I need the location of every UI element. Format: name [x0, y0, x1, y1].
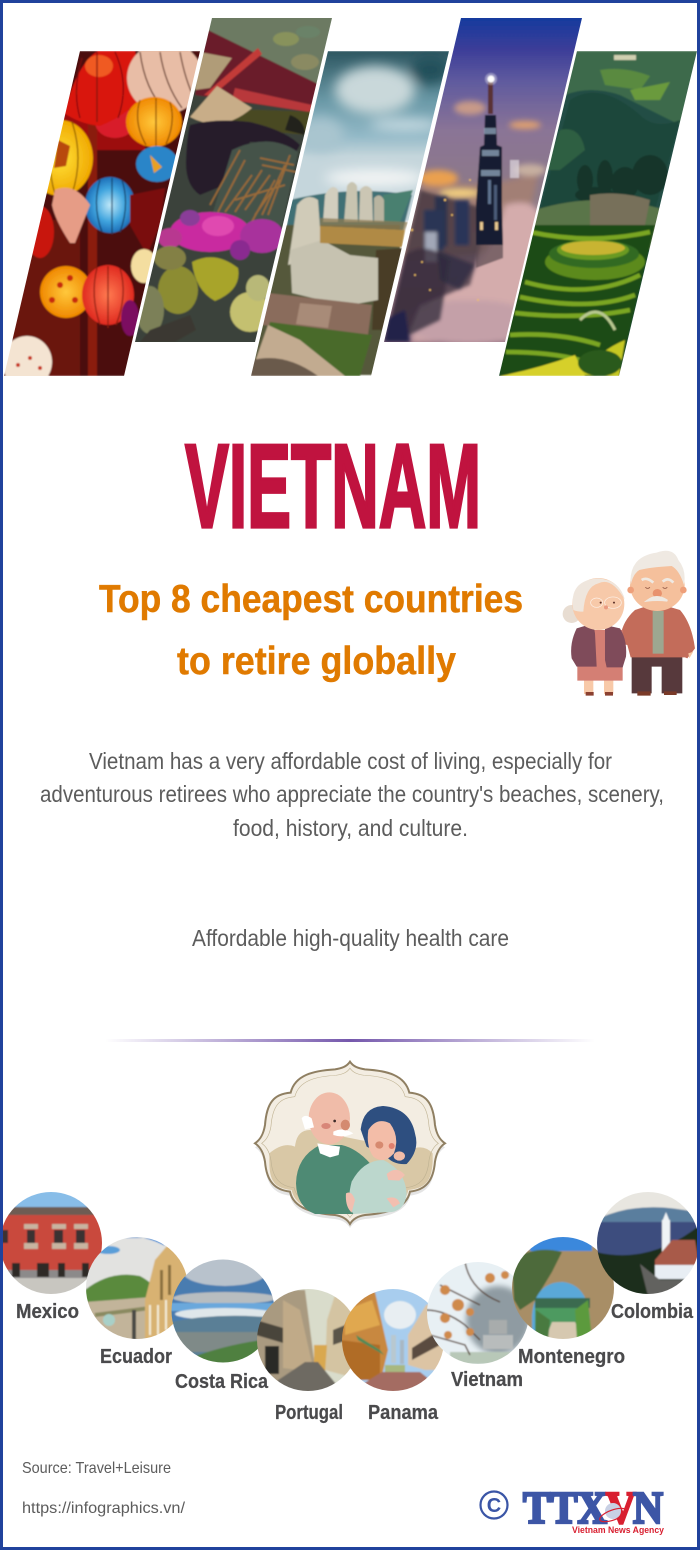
grandfather: [296, 1092, 370, 1214]
photo panel: Landmark 81 tower at night: [380, 15, 585, 345]
photo circle: Panama: [340, 1288, 446, 1392]
photo circle: Colombia: [596, 1191, 700, 1296]
woman: [563, 578, 626, 696]
agency name: Vietnam News Agency: [572, 1525, 665, 1536]
country labels: Ecuador: [100, 1346, 172, 1368]
logo letters: [523, 1482, 663, 1533]
photo panel: rice terraces: [495, 51, 700, 376]
country labels: Colombia: [611, 1301, 694, 1323]
country labels: Mexico: [16, 1301, 79, 1323]
man: [620, 551, 695, 696]
website url: https://infographics.vn/: [22, 1500, 186, 1517]
country labels: [16, 1301, 694, 1424]
grandmother: [346, 1106, 416, 1214]
copyright symbol: C: [487, 1495, 501, 1517]
globe: [598, 1503, 628, 1524]
photo panel: woman sorting lotus flowers: [130, 15, 335, 345]
photo circle: Vietnam: [426, 1261, 530, 1365]
intro paragraph: food, history, and culture.: [233, 815, 468, 841]
heading: top 8 cheapest countries: Top 8 cheapest countries: [99, 578, 523, 621]
text: affordable health care: Affordable high-quality health care: [192, 925, 509, 951]
country labels: Costa Rica: [175, 1371, 269, 1393]
illustration: elderly couple standing: [563, 551, 695, 696]
intro paragraph: [40, 748, 664, 841]
logo letters: TTX: [523, 1482, 607, 1533]
country labels: Vietnam: [451, 1369, 523, 1391]
divider line: [105, 1039, 595, 1042]
source text: Source: Travel+Leisure: [22, 1460, 171, 1477]
heading: top 8 cheapest countries: [99, 578, 523, 683]
photo circle: Montenegro: [510, 1236, 616, 1340]
photo circle: Costa Rica: [170, 1258, 277, 1365]
photo circle: Mexico: [3, 1192, 102, 1294]
illustration: elderly couple in ornamental frame: [255, 1062, 445, 1228]
country labels: Montenegro: [518, 1346, 625, 1368]
heading: top 8 cheapest countries: to retire globally: [177, 640, 456, 683]
photo circle: Portugal: [257, 1289, 350, 1391]
copyright symbol: [480, 1492, 508, 1518]
intro paragraph: Vietnam has a very affordable cost of living, especially for: [89, 748, 612, 774]
logo: TTXVN Vietnam News Agency: [480, 1482, 665, 1536]
logo letters: V: [606, 1482, 636, 1533]
country labels: Panama: [368, 1402, 439, 1424]
photo panel: lanterns: [4, 51, 200, 376]
photo circle: Ecuador: [86, 1237, 186, 1339]
country labels: Portugal: [275, 1402, 343, 1424]
logo letters: N: [633, 1482, 663, 1533]
photo panel: golden bridge hands: [245, 51, 455, 376]
